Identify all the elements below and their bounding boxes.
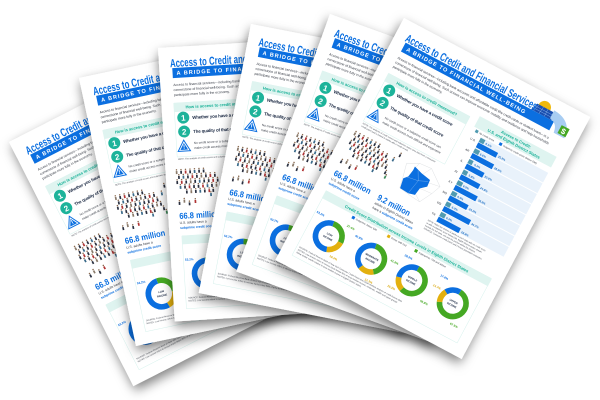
donut: low income: LOW <box>326 231 334 238</box>
bar chart legend: No credit score <box>478 132 495 143</box>
page 2: back sheet: Credit Score Distribution across Income Levels <box>177 233 269 257</box>
page 5: back sheet <box>236 14 528 344</box>
page 4: back sheet: How is access to credit measured? <box>262 85 331 104</box>
subtitle banner <box>401 43 554 130</box>
page 1: back sheet: subprime credit score <box>100 281 133 300</box>
bar chart rows: 25.9% <box>497 155 507 162</box>
distribution legend: Prime: 640-719 <box>390 237 407 248</box>
page 5: back sheet: subprime credit score <box>278 186 312 202</box>
page 4: back sheet: make credit access more difficult and expensive <box>261 128 326 144</box>
page 1: back sheet: cornerstone of financial well-being. Such access can improve economic mobility and resilience and help households <box>39 94 196 176</box>
donut: moderate income: MODERATE <box>365 252 380 262</box>
page 1: back sheet: Access to Credit and Financial Services <box>24 80 161 157</box>
page 3: back sheet: 2 <box>182 127 187 137</box>
bar chart rows: 5.4% <box>473 163 481 170</box>
intro text: cornerstone of financial well-being. Such access can improve economic mobility and resilience and help households <box>394 60 550 146</box>
stat: 66.8 million: subprime credit score <box>328 181 360 201</box>
donut: middle income: MIDDLE <box>407 274 418 283</box>
page 4: back sheet: 2 <box>252 107 259 117</box>
bar chart rows: MO <box>442 190 448 196</box>
bar chart rows: 28.8% <box>477 198 487 206</box>
page 4: back sheet: subprime credit score <box>227 202 262 212</box>
donut: moderate income: 17.3% <box>364 277 374 285</box>
page 3: back sheet: participate more fully in the economy. <box>174 90 230 97</box>
page 2: back sheet <box>79 34 342 346</box>
distribution heading <box>322 191 492 286</box>
bar chart rows: TN <box>431 211 436 216</box>
page 1: back sheet: 1 <box>56 191 65 201</box>
page 1: back sheet: No credit score or a subprime credit score can <box>79 184 137 217</box>
page 2: back sheet: 53.2% <box>137 280 146 285</box>
page 5: back sheet: LOW <box>283 236 291 242</box>
donut: upper income: 17.8% <box>440 273 449 281</box>
page 2: back sheet: 2 <box>114 152 121 162</box>
bar chart rows: U.S. <box>469 136 477 143</box>
page 5: back sheet: Credit Score Distribution across Income Levels <box>319 214 408 250</box>
page 2: back sheet: SOURCE: Federal Reserve Bank of New York Consumer Credit Panel and Urban Institute analysis of credit bureau data <box>146 295 261 322</box>
bar chart rows: MS <box>436 200 442 206</box>
page 2: back sheet: How is access to credit measured? <box>114 115 183 135</box>
page 1: back sheet: How is access to credit measured? <box>57 152 120 187</box>
panel: how access is measured: 1 <box>385 86 394 96</box>
page 3: back sheet: Access to financial services—including bank accounts and affordable credit like credit cards or student loans—is a <box>173 73 344 87</box>
donut: low income: 53.2% <box>316 210 326 218</box>
donut: middle income <box>387 253 444 308</box>
page 1: back sheet: Credit Score Distribution across Income Levels <box>149 243 234 289</box>
bar chart rows: 6.4% <box>457 195 465 202</box>
bar chart rows: 22.9% <box>484 175 493 182</box>
page 4: back sheet: No credit score or a subprime credit score can <box>262 123 325 139</box>
page 4: back sheet: 53.2% <box>224 234 233 239</box>
bar chart rows <box>428 133 548 257</box>
page 4: back sheet <box>199 24 458 333</box>
page 1: back sheet: 66.8 million <box>93 265 134 292</box>
donut: middle income: 28.9% <box>404 253 414 261</box>
bar chart rows: 6.5% <box>462 184 470 191</box>
bar chart rows: 6.4% <box>445 216 453 223</box>
page 4: back sheet: LOW <box>240 250 247 255</box>
bar chart rows: 28.8% <box>460 230 470 238</box>
bar chart rows: 6.6% <box>479 152 487 159</box>
bar chart rows: AR <box>465 147 471 153</box>
panel: how access is measured: The quality of that credit score <box>389 105 445 138</box>
panel: how access is measured: make credit access more difficult and expensive <box>382 120 442 155</box>
icon: bridge arch and dollar tile: $ <box>559 127 568 137</box>
page 2: back sheet: make credit access more difficult and expensive <box>129 156 194 173</box>
stat: 66.8 million: 66.8 million <box>332 168 373 196</box>
page 5: back sheet: U.S. adults have a <box>279 181 306 194</box>
bar chart notes: include the full state, not only the portion within the District. <box>424 224 476 254</box>
page 4: back sheet: 1 <box>255 93 262 103</box>
page 1: back sheet: NOTE: The analysis of credit scores and subprime status uses data from a consumer credit panel. <box>71 192 157 238</box>
bar chart rows: 34.7% <box>470 222 480 229</box>
stat: 9.2 million: have a subprime credit score <box>371 206 413 230</box>
intro text: participate more fully in the economy. <box>392 65 443 95</box>
page 2: back sheet: subprime credit score <box>127 244 162 255</box>
donut: upper income: INCOME <box>446 301 458 309</box>
bar chart notes: or with a subprime score below 640. Eighth District states shown <box>426 222 483 254</box>
donut: upper income <box>420 273 477 329</box>
page 3: back sheet: make credit access more difficult and expensive <box>194 142 260 150</box>
page 6: front sheet <box>275 18 590 359</box>
stat: 9.2 million: 9.2 million <box>376 192 412 218</box>
footnote under panel: NOTE: The analysis of credit scores and subprime status uses data from a consumer <box>362 122 436 164</box>
page 3: back sheet: NOTES: Low income refers to census tracts below 50% of area median income; other groups follow similar rules. <box>188 293 298 303</box>
page 1: back sheet: NOTES: Low income refers to census tracts below 50% of area median income; other groups follow similar rules. <box>137 311 236 363</box>
distribution notes: follow similar cutoffs relative to area median income in Eighth District states. <box>296 251 362 288</box>
donut: low income: 27.4% <box>346 224 356 231</box>
distribution legend: Superprime: 720 and above <box>418 251 447 269</box>
page 5: back sheet: NOTES: Low income refers to census tracts below 50% of area median income; other groups follow similar rules. <box>257 257 361 297</box>
page 2: back sheet: LOW <box>158 289 165 294</box>
page 5: back sheet: 2 <box>317 97 325 107</box>
panel heading: Access to Credit: <box>500 129 532 149</box>
page 1: back sheet: U.S. adults have a <box>98 280 124 296</box>
page 3: back sheet: U.S. adults have a <box>180 219 207 225</box>
page 1: back sheet: LOW <box>140 324 148 330</box>
page 2: back sheet: The quality of that credit score <box>126 140 186 158</box>
donut: middle income: 15.3% <box>387 284 396 291</box>
donut: moderate income: 41.8% <box>390 258 400 266</box>
panel: how access is measured: How is access to credit measured? <box>395 80 459 117</box>
page 1: back sheet: make credit access more difficult and expensive <box>81 188 142 221</box>
page 3: back sheet <box>158 35 385 321</box>
donut: middle income: INCOME <box>405 278 417 286</box>
page 3: back sheet: subprime credit score <box>180 224 215 230</box>
page 2: back sheet: cornerstone of financial well-being. Such access can improve economic mobility and resilience and help households <box>100 79 271 119</box>
title: Access to Credit and Financial Services <box>403 33 539 113</box>
page 1: back sheet: A BRIDGE TO FINANCIAL WELL-BEING <box>35 95 157 161</box>
page 5: back sheet: INCOME <box>280 239 291 246</box>
page 3: back sheet: How is access to credit measured? <box>185 100 254 109</box>
page 5: back sheet: make credit access more difficult and expensive <box>323 118 386 145</box>
page 4: back sheet: INCOME <box>237 254 248 260</box>
panel: how access is measured: Whether you have a credit score <box>396 93 454 127</box>
page 2: back sheet: 66.8 million <box>124 228 166 246</box>
page 2: back sheet: A BRIDGE TO FINANCIAL WELL-BEING <box>101 70 233 104</box>
page 4: back sheet: SOURCE: Federal Reserve Bank of New York Consumer Credit Panel and Urban Institute analysis of credit bureau data <box>217 272 333 298</box>
page 1: back sheet: Access to financial services—including bank accounts and affordable credit like credit cards or student loans—is a <box>37 90 191 172</box>
page 3: back sheet: Access to Credit and Financial Services <box>170 49 318 70</box>
intro text: Access to financial services—including bank accounts and affordable credit like credit cards or student loans—is a <box>397 56 550 140</box>
page 5: back sheet: The quality of that credit score <box>328 102 387 128</box>
page 3: back sheet: INCOME <box>203 273 214 278</box>
page 1: back sheet: 53.2% <box>117 320 127 327</box>
page 5: back sheet: cornerstone of financial well-being. Such access can improve economic mobility and resilience and help households <box>327 57 492 120</box>
page 5: back sheet: No credit score or a subprime credit score can <box>324 114 385 139</box>
page 4: back sheet: Access to Credit and Financial Services <box>257 37 405 77</box>
donut: upper income: 14.7% <box>432 283 442 291</box>
page 2: back sheet: INCOME <box>157 292 168 299</box>
panel: how access is measured <box>363 73 470 164</box>
page 4: back sheet: NOTES: Low income refers to census tracts below 50% of area median income; other groups follow similar rules. <box>217 275 325 299</box>
subtitle banner: A BRIDGE TO FINANCIAL WELL-BEING <box>405 47 526 115</box>
donut: moderate income: 40.9% <box>354 234 364 241</box>
page 1: back sheet: 2 <box>63 203 71 214</box>
page 1: back sheet: INCOME <box>140 326 151 335</box>
page 2: back sheet: U.S. adults have a <box>126 240 153 250</box>
page 1: back sheet <box>9 46 321 386</box>
page 2: back sheet: 1 <box>111 139 118 148</box>
donut: middle income: 55.8% <box>419 299 429 307</box>
page 4: back sheet: A BRIDGE TO FINANCIAL WELL-BEING <box>262 51 395 82</box>
page 4: back sheet: cornerstone of financial well-being. Such access can improve economic mobility and resilience and help households <box>255 67 427 104</box>
map of Eighth District states <box>393 157 446 207</box>
page 3: back sheet: 66.8 million <box>179 209 221 221</box>
page 3: back sheet: 1 <box>181 113 186 123</box>
donut: low income <box>300 208 356 262</box>
bar chart notes: NOTE: Rates are shares of adults in each state with no credit score <box>427 219 487 253</box>
page 4: back sheet: Credit Score Distribution across Income Levels <box>272 223 365 246</box>
page 2: back sheet: Whether you have a credit score <box>123 126 186 144</box>
distribution legend <box>351 216 447 269</box>
panel: how access is measured: No credit score or a subprime credit score can <box>384 116 442 149</box>
page 2: back sheet: participate more fully in the economy. <box>101 109 157 124</box>
bar chart rows: 5.8% <box>468 174 476 180</box>
page 4: back sheet: The quality of that credit score <box>264 111 324 128</box>
page 2: back sheet: Access to Credit and Financial Services <box>92 56 239 98</box>
page 2: back sheet: No credit score or a subprime credit score can <box>128 151 191 169</box>
page 3: back sheet: 53.2% <box>185 257 194 262</box>
panel: how access is measured: 2 <box>378 98 387 109</box>
people map of the United States <box>339 130 401 187</box>
page 5: back sheet: 66.8 million <box>281 172 323 195</box>
panel heading: U.S. and Eighth District States <box>487 128 542 160</box>
page 1: back sheet: The quality of that credit score <box>73 175 130 207</box>
page 5: back sheet: 53.2% <box>270 217 279 224</box>
donut: low income: INCOME <box>322 234 334 242</box>
page 1: back sheet: SOURCE: Federal Reserve Bank of New York Consumer Credit Panel and Urban Institute analysis of credit bureau data <box>136 305 241 361</box>
bar chart rows: KY <box>448 179 453 185</box>
page 3: back sheet: NOTE: The analysis of credit scores and subprime status uses data from a consumer credit panel. <box>178 152 273 161</box>
distribution legend: Subprime: below 640 <box>355 218 378 232</box>
stat: 9.2 million: adults in Eighth District states <box>374 201 414 225</box>
donut: upper income: 67.5% <box>449 322 459 329</box>
page 4: back sheet: U.S. adults have a <box>228 197 255 206</box>
bar chart rows: 6.1% <box>485 142 493 149</box>
icon: bridge arch and dollar tile <box>545 110 574 139</box>
page 4: back sheet: NOTE: The analysis of credit scores and subprime status uses data from a consumer credit panel. <box>242 135 336 157</box>
page 5: back sheet: Whether you have a credit score <box>333 89 394 116</box>
page 5: back sheet: Access to financial services—including bank accounts and affordable credit like credit cards or student loans—is a <box>329 52 491 115</box>
bar chart rows: 24.8% <box>479 186 489 193</box>
bar chart legend: Subprime credit score (below 640) <box>502 145 537 165</box>
distribution heading: Credit Score Distribution across Income Levels in Eighth District States <box>344 204 470 274</box>
page 3: back sheet: Credit Score Distribution across Income Levels <box>229 229 322 240</box>
page 5: back sheet: NOTE: The analysis of credit scores and subprime status uses data from a consumer credit panel. <box>303 123 394 158</box>
panel: access to credit bar chart <box>420 116 557 269</box>
page 2: back sheet: NOTES: Low income refers to census tracts below 50% of area median income; other groups follow similar rules. <box>146 300 254 325</box>
icon: sun and solar panel <box>531 97 558 120</box>
page 3: back sheet: No credit score or a subprime credit score can <box>194 137 257 145</box>
distribution notes: SOURCE: Federal Reserve Bank of New York Consumer Credit Panel and Urban Institute analysis of credit bureau data <box>298 246 403 303</box>
bar chart rows: IN <box>454 169 458 174</box>
page 3: back sheet: SOURCE: Federal Reserve Bank of New York Consumer Credit Panel and Urban Institute analysis of credit bureau data <box>188 289 305 300</box>
bar chart notes: SOURCE: Consumer credit panel and Census population estimates. <box>423 227 483 261</box>
page 2: back sheet: NOTE: The analysis of credit scores and subprime status uses data from a consumer credit panel. <box>115 164 209 187</box>
panel heading <box>474 116 557 168</box>
page 3: back sheet: cornerstone of financial well-being. Such access can improve economic mobility and resilience and help households <box>173 78 347 92</box>
page 3: back sheet: LOW <box>205 269 211 274</box>
page 4: back sheet: participate more fully in the economy. <box>254 72 310 86</box>
bar chart rows: 6.0% <box>451 205 459 212</box>
page 1: back sheet: Whether you have a credit score <box>67 161 126 194</box>
panel: credit score distribution donuts <box>292 191 492 343</box>
donut: upper income: UPPER <box>449 298 459 305</box>
page 5: back sheet: 1 <box>322 83 329 94</box>
donut: low income: 19.4% <box>329 254 338 262</box>
bar chart legend <box>474 129 538 165</box>
page 5: back sheet: A BRIDGE TO FINANCIAL WELL-BEING <box>336 42 464 94</box>
bar chart rows: 24.2% <box>468 207 478 215</box>
footnote under panel: credit panel and is limited to adults with a credit record. <box>361 125 409 153</box>
page 3: back sheet: Whether you have a credit score <box>192 111 256 120</box>
page 5: back sheet: SOURCE: Federal Reserve Bank of New York Consumer Credit Panel and Urban Institute analysis of credit bureau data <box>258 254 369 297</box>
donut: moderate income <box>338 234 402 292</box>
page 3: back sheet: The quality of that credit score <box>193 125 254 134</box>
page 2: back sheet: Access to financial services—including bank accounts and affordable credit like credit cards or student loans—is a <box>99 75 267 114</box>
bar chart rows: IL <box>460 158 464 163</box>
page 5: back sheet: Access to Credit and Financial Services <box>332 28 476 90</box>
stat: 66.8 million: U.S. adults have a <box>330 177 356 193</box>
page 4: back sheet: Access to financial services—including bank accounts and affordable credit like credit cards or student loans—is a <box>256 62 425 98</box>
page 4: back sheet: 66.8 million <box>229 187 271 205</box>
distribution notes: NOTES: Low income refers to census tracts below 50% of area median income; moderate, middle and upper groups <box>297 248 399 304</box>
page 5: back sheet: participate more fully in the economy. <box>325 62 379 85</box>
stat: 9.2 million <box>371 192 421 230</box>
bar chart rows: 28.0% <box>493 166 503 174</box>
page 1: back sheet: participate more fully in the economy. <box>41 152 93 181</box>
page 5: back sheet: How is access to credit measured? <box>331 77 397 105</box>
page 3: back sheet: A BRIDGE TO FINANCIAL WELL-BEING <box>176 63 311 77</box>
donut: moderate income: INCOME <box>365 256 376 265</box>
page 4: back sheet: Whether you have a credit score <box>266 97 330 114</box>
